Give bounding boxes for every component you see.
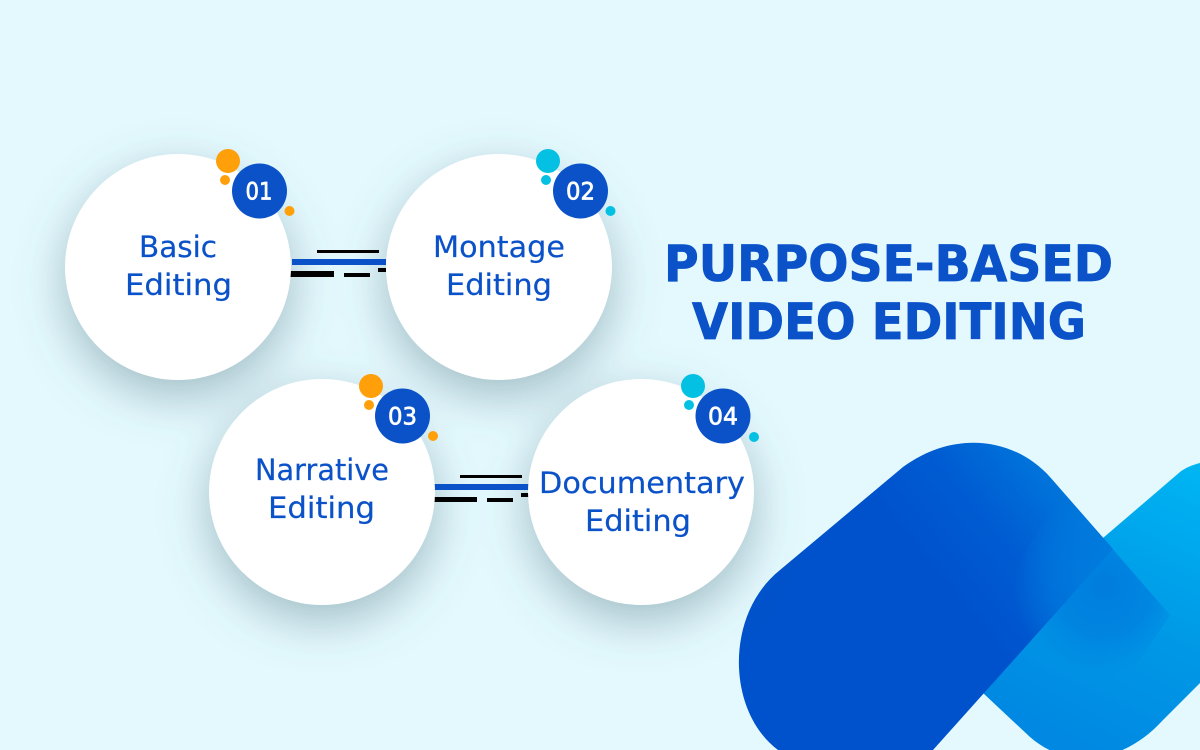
badge 04: 04	[708, 402, 738, 430]
panel: montage editing	[386, 149, 616, 380]
badge 02: 02	[566, 178, 595, 206]
decorative rounded shapes	[739, 443, 1200, 750]
label: montage editing: Montage	[433, 230, 565, 264]
label: narrative editing: Narrative	[255, 453, 389, 487]
panel: narrative editing	[209, 374, 438, 605]
label: basic editing: Editing	[125, 268, 232, 302]
title	[664, 235, 1113, 351]
panel: basic editing	[65, 149, 294, 380]
label: documentary editing	[539, 466, 745, 538]
blended overlap band	[983, 489, 1170, 720]
connector lines: 01 to 02	[290, 250, 386, 277]
circle shadows	[65, 170, 754, 621]
panel: documentary editing	[528, 374, 759, 605]
label: narrative editing: Editing	[268, 491, 375, 525]
badge 01	[216, 149, 294, 218]
title: PURPOSE-BASED	[664, 235, 1113, 293]
badge 04	[681, 374, 759, 444]
label: montage editing: Editing	[446, 268, 552, 302]
back light blue shape	[983, 463, 1200, 750]
label: basic editing: Basic	[139, 230, 217, 264]
title: VIDEO EDITING	[692, 293, 1086, 351]
badge 02	[536, 149, 616, 218]
label: documentary editing: Documentary	[539, 466, 745, 500]
badge 03	[359, 374, 438, 444]
badge 03: 03	[388, 402, 417, 430]
badge 01: 01	[246, 178, 272, 206]
label: narrative editing	[255, 453, 389, 525]
label: documentary editing: Editing	[585, 504, 691, 538]
front dark blue shape	[739, 443, 1113, 750]
connector lines: 03 to 04	[433, 475, 529, 502]
label: basic editing	[125, 230, 232, 302]
label: montage editing	[433, 230, 565, 302]
